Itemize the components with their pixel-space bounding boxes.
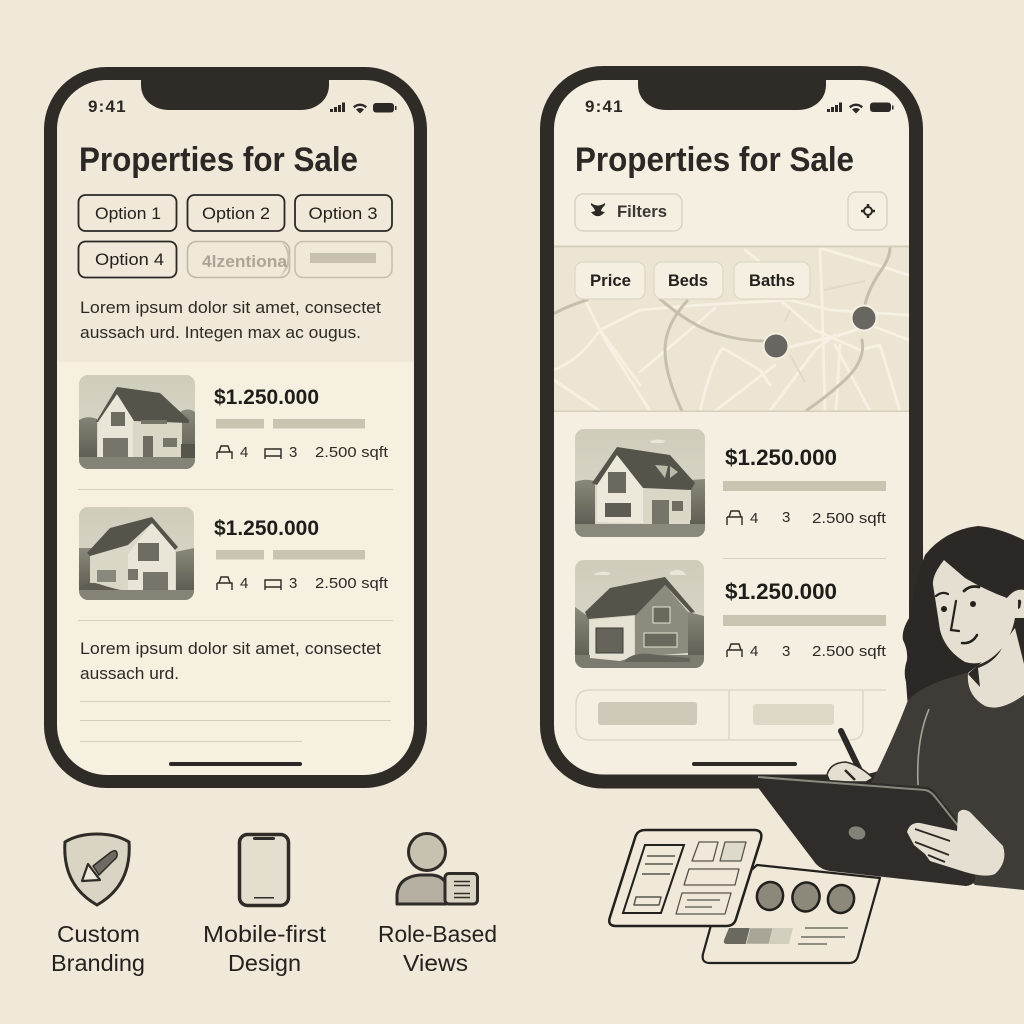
illustration: designer with tablet <box>750 526 1024 890</box>
listing 2 details: $1.250.000 <box>214 517 319 540</box>
front card: layout wireframe <box>609 830 761 926</box>
paragraph <box>80 298 381 342</box>
map <box>554 246 909 412</box>
jaw shadow <box>968 648 1002 687</box>
option buttons <box>78 195 392 278</box>
listing 3 details: 4 <box>750 510 758 527</box>
listing 2 details <box>214 517 389 592</box>
status time: 9:41 <box>88 97 127 116</box>
listing 4 details: 2.500 sqft <box>812 643 887 660</box>
icon: user with card <box>397 834 478 904</box>
home indicator <box>169 762 302 766</box>
phone frame right <box>547 73 916 782</box>
filter chips: Price <box>590 271 631 290</box>
filter button <box>575 194 682 231</box>
listing 4 details: 3 <box>782 643 790 660</box>
feature: role based <box>378 834 497 976</box>
listing 1 details <box>214 386 389 461</box>
listing 3 details: $1.250.000 <box>725 445 837 470</box>
filter chips: Beds <box>668 271 708 290</box>
option buttons: Option 3 <box>308 205 378 223</box>
listing image 3 <box>575 429 705 537</box>
option buttons: Option 1 <box>95 205 161 223</box>
stylus <box>841 731 865 781</box>
status time right: 9:41 <box>585 97 624 116</box>
tablet camera <box>847 825 867 841</box>
label: mobile first: Mobile-first <box>203 921 327 947</box>
listing image 4 <box>575 560 704 668</box>
listing 3 details: 2.500 sqft <box>812 510 887 527</box>
label: custom branding: Branding <box>51 950 145 976</box>
second paragraph: aussach urd. <box>80 664 179 683</box>
home indicator right <box>692 762 797 766</box>
filter chips: Baths <box>749 271 795 290</box>
feature: mobile first <box>203 834 327 976</box>
face <box>933 560 1024 663</box>
locate button <box>848 192 887 230</box>
listing 1 details: 3 <box>289 444 297 461</box>
label: custom branding <box>51 921 145 976</box>
notch <box>141 78 329 110</box>
listing 4 details <box>723 579 887 660</box>
sweater <box>868 673 1024 890</box>
label: mobile first <box>203 921 327 976</box>
bottom action bar <box>576 690 886 740</box>
listing 4 details: 4 <box>750 643 758 660</box>
second paragraph <box>80 639 381 683</box>
second paragraph: Lorem ipsum dolor sit amet, consectet <box>80 639 381 658</box>
listing 3 details: 3 <box>782 509 790 526</box>
icon: phone <box>240 834 288 906</box>
icon: shield with trowel <box>65 834 129 905</box>
listing 1 details: 2.500 sqft <box>315 444 389 461</box>
label: role based: Role-Based <box>378 921 497 947</box>
listing 2 details: 3 <box>289 575 297 592</box>
ear <box>1007 590 1024 618</box>
back card: palette <box>703 865 880 963</box>
tablet edge highlight <box>758 777 963 832</box>
option buttons: 4lzentiona <box>202 252 288 271</box>
notch right <box>638 78 826 110</box>
label: role based <box>378 921 497 976</box>
illustration: floating wireframe cards <box>609 830 880 963</box>
tablet <box>750 775 975 886</box>
label: role based: Views <box>403 950 468 976</box>
face features <box>936 586 979 643</box>
panel: left phone <box>50 74 420 782</box>
map pins <box>764 334 788 358</box>
listing 2 details: 4 <box>240 575 248 592</box>
hair back <box>903 526 1024 708</box>
panel: right phone <box>547 73 916 782</box>
listing 3 details <box>723 445 887 527</box>
label: custom branding: Custom <box>57 921 140 947</box>
option buttons: Option 2 <box>202 205 270 223</box>
status icons <box>330 102 396 114</box>
listing image 1 <box>79 375 195 469</box>
label: mobile first: Design <box>228 950 301 976</box>
listing image 2 <box>79 507 194 600</box>
heading: Properties for Sale <box>79 141 358 179</box>
listing 1 details: 4 <box>240 444 248 461</box>
paragraph: aussach urd. Integen max ac ougus. <box>80 323 361 342</box>
option buttons: Option 4 <box>95 251 164 269</box>
sleeve highlight <box>918 709 929 785</box>
drawing hand <box>827 762 873 782</box>
holding hand <box>907 810 1004 876</box>
paragraph: Lorem ipsum dolor sit amet, consectet <box>80 298 381 317</box>
feature: custom branding <box>51 834 145 976</box>
status icons right <box>827 102 894 114</box>
upper screen area <box>57 80 414 362</box>
phone frame left <box>50 74 420 782</box>
neck <box>968 628 1024 708</box>
filter button: Filters <box>617 202 667 221</box>
heading right: Properties for Sale <box>575 141 854 179</box>
listing 2 details: 2.500 sqft <box>315 575 389 592</box>
filter chips <box>575 262 810 299</box>
listing 1 details: $1.250.000 <box>214 386 319 409</box>
listing 4 details: $1.250.000 <box>725 579 837 604</box>
